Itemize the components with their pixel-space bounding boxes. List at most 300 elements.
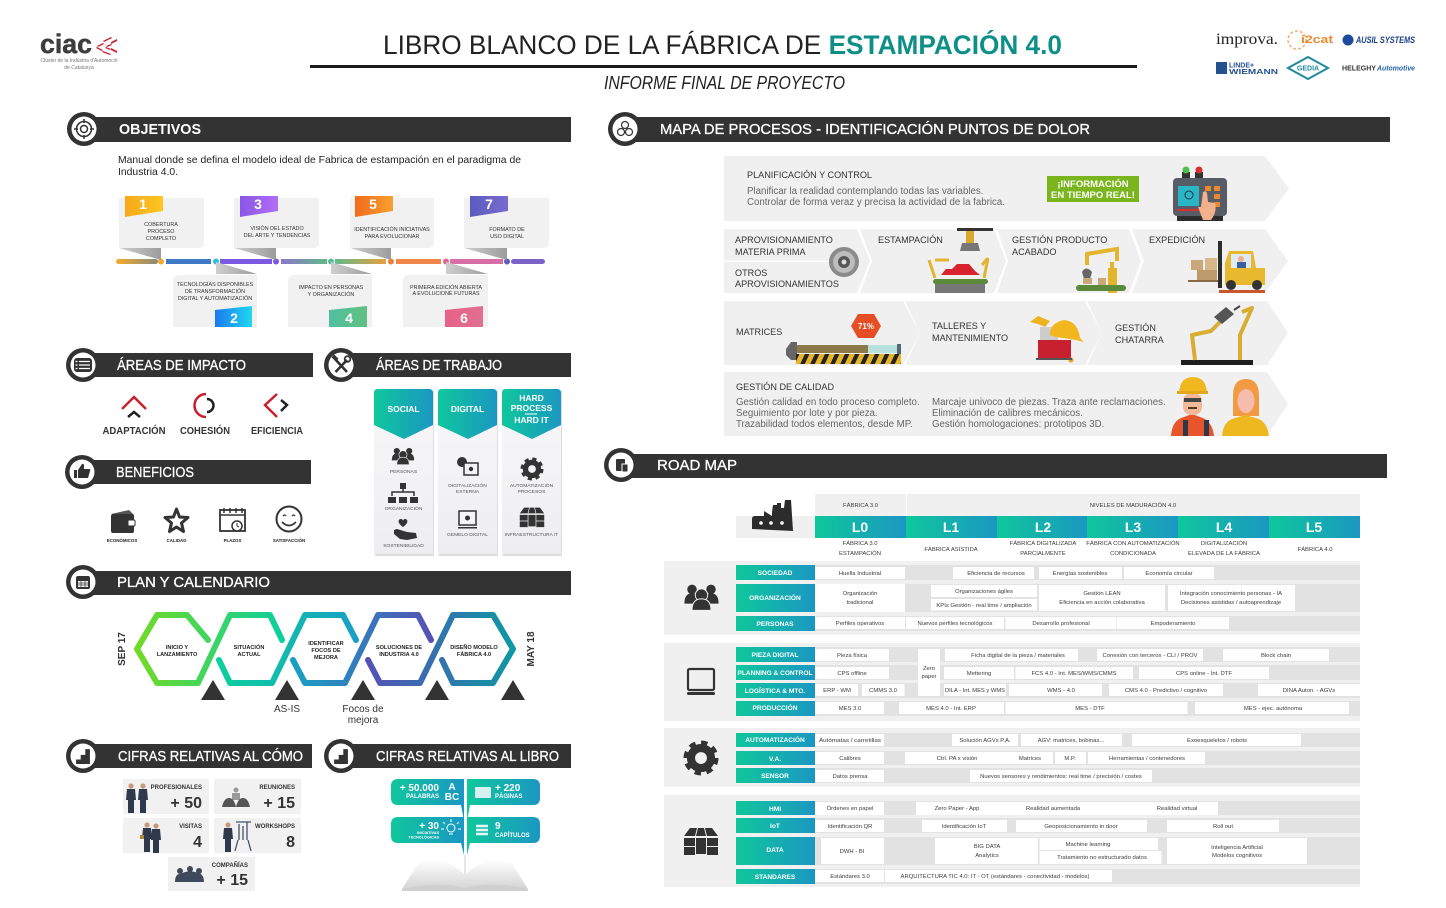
heading: mapa de procesos: MAPA DE PROCESOS - IDENTIFICACIÓN PUNTOS DE DOLOR bbox=[660, 121, 1090, 138]
column: digital: DIGITAL bbox=[451, 404, 484, 414]
column: digital bbox=[438, 389, 498, 556]
row: sociedad: SOCIEDAD bbox=[758, 570, 793, 577]
stat: companias bbox=[168, 857, 255, 891]
bubble: iniciativas bbox=[391, 817, 464, 855]
row: organizacion: KPIs Gestión - real time / ampliación bbox=[936, 603, 1032, 609]
row: sociedad bbox=[736, 565, 1360, 580]
row: automatizacion: Autómatas / carretillas bbox=[819, 738, 881, 744]
row: personas: Desarrollo profesional bbox=[1032, 621, 1090, 627]
segment: matrices bbox=[724, 301, 920, 365]
plan: hexagon chain bbox=[137, 615, 513, 683]
objective card 6 bbox=[403, 262, 488, 327]
stat: profesionales: + 50 bbox=[170, 795, 202, 812]
plan: phase labels: LANZAMIENTO bbox=[157, 652, 198, 658]
level descriptions: CONDICIONADA bbox=[1110, 551, 1156, 557]
segment: talleres y mantenimiento: MANTENIMIENTO bbox=[932, 333, 1008, 343]
row: logistica: DINA Auton. - AGVs bbox=[1283, 688, 1335, 694]
roadmap group: automatizacion bbox=[664, 728, 1360, 787]
levels L0-L5: L0 bbox=[852, 519, 868, 535]
segment: gestion chatarra bbox=[1087, 301, 1288, 365]
stat: workshops: WORKSHOPS bbox=[255, 824, 295, 830]
stat: profesionales bbox=[123, 779, 209, 814]
column: digital: EXTERNA bbox=[456, 489, 480, 495]
objective card 7: 7 bbox=[485, 196, 493, 212]
bubble: palabras: BC bbox=[445, 792, 459, 803]
level descriptions: FÁBRICA 4.0 bbox=[1297, 546, 1333, 553]
column: digital: GEMELO DIGITAL bbox=[447, 532, 488, 538]
row: logistica: LOGÍSTICA & MTO. bbox=[745, 686, 805, 695]
callout: informacion en tiempo real bbox=[1047, 176, 1139, 202]
row: va: Calibres bbox=[839, 756, 861, 762]
column: social bbox=[374, 389, 434, 556]
column: hard process: HARD IT bbox=[514, 415, 550, 425]
stat: visitas: VISITAS bbox=[179, 824, 202, 830]
row: data: Analytics bbox=[975, 853, 999, 859]
cell: zero paper bbox=[918, 649, 940, 696]
level descriptions: FÁBRICA ASISTIDA bbox=[924, 546, 978, 553]
row: organizacion: tradicional bbox=[847, 600, 873, 606]
row: iot bbox=[736, 818, 1360, 833]
objective card 4 bbox=[288, 262, 372, 327]
heading: cifras relativas al libro: CIFRAS RELATIVAS AL LIBRO bbox=[376, 748, 559, 765]
segment: expedicion: EXPEDICIÓN bbox=[1149, 235, 1205, 245]
bubble: iniciativas: + 30 bbox=[419, 821, 439, 832]
row: logistica: ERP - WM bbox=[823, 688, 851, 694]
partner logos: HELEGHY bbox=[1342, 66, 1376, 72]
heading: areas de impacto: ÁREAS DE IMPACTO bbox=[117, 357, 246, 374]
partner logos: LINDE+ bbox=[1229, 62, 1254, 70]
row: pieza digital bbox=[736, 647, 1360, 662]
stat: reuniones: + 15 bbox=[263, 795, 295, 812]
row: personas: Perfiles operativos bbox=[836, 621, 884, 627]
column: hard process bbox=[502, 389, 562, 556]
column: hard process: INFRAESTRUCTURA IT bbox=[505, 532, 558, 538]
row: automatizacion: AGV: matrices, bobinas... bbox=[1038, 738, 1105, 744]
objective card 6: A EVOLUCIONE FUTURAS bbox=[412, 291, 480, 297]
row: organizacion: Organización bbox=[843, 591, 877, 597]
heading: road map: ROAD MAP bbox=[657, 457, 737, 474]
plan: phase labels: FÁBRICA 4.0 bbox=[457, 651, 491, 658]
row: automatizacion bbox=[736, 733, 1360, 747]
level descriptions: FÁBRICA CON AUTOMATIZACIÓN bbox=[1086, 540, 1180, 547]
plan: phase labels: INDUSTRIA 4.0 bbox=[379, 652, 419, 658]
segment: gestion chatarra: CHATARRA bbox=[1115, 335, 1165, 345]
text: calidad izquierda: Trazabilidad todos elementos, desde MP. bbox=[736, 419, 913, 430]
icon: open book bbox=[402, 855, 528, 891]
icon: gemelo digital bbox=[458, 511, 477, 528]
bubble: capitulos: CAPÍTULOS bbox=[495, 831, 530, 839]
partner logos: AUSIL SYSTEMS bbox=[1355, 35, 1415, 45]
row: pieza digital: PIEZA DIGITAL bbox=[752, 652, 798, 659]
row: sensor bbox=[736, 768, 1360, 783]
stat: visitas bbox=[123, 818, 209, 853]
column: hard process: HARD bbox=[519, 393, 544, 403]
row: hmi bbox=[736, 801, 1360, 815]
milestone label: focos de mejora: Focos de bbox=[342, 704, 384, 715]
objective card 4: IMPACTO EN PERSONAS bbox=[299, 285, 364, 291]
level descriptions: PARCIALMENTE bbox=[1020, 551, 1066, 557]
logo: ciac: Clúster de la Indústria d'Automoció bbox=[40, 58, 118, 64]
subtitle: INFORME FINAL DE PROYECTO bbox=[604, 73, 845, 93]
row: produccion: PRODUCCIÓN bbox=[752, 703, 798, 712]
plan: phase labels: IDENTIFICAR bbox=[308, 641, 344, 647]
benefit: economicos bbox=[107, 510, 137, 543]
row: pieza digital: Ficha digital de la pieza / materiales bbox=[971, 653, 1065, 659]
icon: personas bbox=[392, 448, 414, 465]
row: data: Tratamiento no estructurado datos bbox=[1057, 855, 1147, 861]
title underline bbox=[310, 65, 1137, 68]
badge: 71% bbox=[851, 314, 881, 338]
row: logistica: DILA - Int. MES y WMS bbox=[945, 688, 1005, 694]
row: hmi: HMI bbox=[769, 806, 781, 813]
column: social: SOCIAL bbox=[387, 404, 420, 414]
icon: control panel bbox=[1173, 166, 1227, 221]
row: organizacion: Integración conocimiento personas - IA bbox=[1180, 591, 1282, 597]
header: niveles de maduracion: NIVELES DE MADURACIÓN 4.0 bbox=[1090, 502, 1177, 509]
partner logos: GEDIA bbox=[1297, 66, 1319, 72]
logo: ciac bbox=[40, 29, 118, 71]
stat: reuniones: REUNIONES bbox=[259, 785, 295, 791]
level descriptions: FÁBRICA 3.0 bbox=[842, 540, 878, 547]
objective card 3 bbox=[234, 196, 319, 260]
row: produccion: MES 3.0 bbox=[839, 706, 862, 712]
bubble: palabras: + 50.000 bbox=[400, 783, 439, 794]
row: planning and control: FCS 4.0 - Int. MES/WMS/CMMS bbox=[1031, 671, 1117, 677]
process: gestion de calidad bbox=[724, 372, 1288, 436]
plan: phase labels: MEJORA bbox=[314, 655, 338, 661]
row: data bbox=[736, 837, 1360, 865]
row: personas: Nuevos perfiles tecnológicos bbox=[918, 621, 993, 627]
row: iot: Roll out bbox=[1213, 824, 1233, 830]
text: calidad izquierda bbox=[736, 397, 920, 430]
heading: road map bbox=[604, 448, 1387, 482]
row: iot: Geoposicionamiento in door bbox=[1044, 824, 1118, 830]
plan: phase labels bbox=[157, 641, 498, 661]
segment: gestion chatarra: GESTIÓN bbox=[1115, 323, 1156, 333]
row: hmi: Zero Paper - App bbox=[935, 806, 980, 812]
icon: infraestructura bbox=[520, 508, 544, 527]
benefit: plazos bbox=[220, 508, 245, 543]
icon: box bbox=[684, 828, 718, 855]
benefit: plazos: PLAZOS bbox=[224, 538, 241, 543]
row: iot: Identificación QR bbox=[828, 824, 872, 830]
benefit: economicos: ECONÓMICOS bbox=[107, 538, 137, 543]
segment: estampacion: ESTAMPACIÓN bbox=[878, 235, 943, 245]
column: digital: DIGITALIZACIÓN bbox=[448, 482, 487, 489]
plan: phase labels: SITUACIÓN bbox=[234, 643, 264, 651]
text: calidad derecha: Eliminación de calibres mecánicos. bbox=[932, 408, 1083, 419]
plan: start date: SEP 17 bbox=[117, 632, 128, 666]
heading: areas de trabajo bbox=[324, 348, 571, 382]
row: produccion: MES - DTF bbox=[1075, 706, 1105, 712]
stat: companias: + 15 bbox=[216, 872, 248, 889]
objective card 2: DE TRANSFORMACIÓN bbox=[185, 288, 245, 295]
benefit: calidad bbox=[165, 509, 188, 543]
row: organizacion: Organizaciones ágiles bbox=[955, 589, 1013, 595]
heading: cifras relativas al como bbox=[66, 739, 312, 773]
bubble: paginas: + 220 bbox=[495, 783, 521, 794]
row: standares bbox=[736, 869, 1360, 884]
segment: gestion producto acabado: GESTIÓN PRODUCTO bbox=[1012, 235, 1107, 245]
icon: digitalizacion externa bbox=[457, 457, 478, 475]
segment: aprovisionamiento: APROVISIONAMIENTO bbox=[735, 235, 833, 245]
segment: gestion producto acabado: ACABADO bbox=[1012, 247, 1056, 257]
row: data: Machine learning bbox=[1066, 842, 1110, 848]
row: data: DWH - BI bbox=[840, 849, 865, 855]
icon: workers bbox=[1171, 377, 1269, 436]
heading: cifras relativas al libro bbox=[324, 739, 571, 773]
row: sensor: Nuevos sensores y rendimientos: real time / precisión / costes bbox=[980, 774, 1142, 780]
impact: eficiencia bbox=[251, 394, 303, 437]
stat: workshops: 8 bbox=[286, 834, 295, 851]
process: gestion de calidad: GESTIÓN DE CALIDAD bbox=[736, 382, 834, 392]
levels L0-L5: L1 bbox=[943, 519, 959, 535]
column: social: PERSONAS bbox=[390, 469, 418, 475]
heading: plan y calendario: PLAN Y CALENDARIO bbox=[117, 574, 270, 591]
row: data: DATA bbox=[766, 847, 784, 854]
segment: aprovisionamiento: OTROS bbox=[735, 268, 767, 278]
objective card 2 bbox=[173, 262, 257, 327]
objective card 1 bbox=[119, 196, 204, 260]
row: pieza digital: Pieza física bbox=[837, 653, 868, 659]
partner logos: improva. bbox=[1216, 31, 1278, 48]
row: pieza digital: Conexión con terceros - CLI / PROV bbox=[1103, 653, 1198, 659]
stat: companias: COMPAÑÍAS bbox=[212, 861, 248, 869]
heading: objetivos: OBJETIVOS bbox=[119, 121, 201, 138]
badge: 71%: 71% bbox=[858, 322, 874, 331]
icon: sostenibilidad bbox=[394, 519, 417, 540]
stat: profesionales: PROFESIONALES bbox=[151, 785, 202, 791]
row: sociedad: Energías sostenibles bbox=[1053, 571, 1107, 577]
row: data: BIG DATA bbox=[974, 844, 1000, 850]
heading: plan y calendario bbox=[66, 565, 571, 599]
objective card 4: 4 bbox=[345, 310, 353, 326]
row: sensor: SENSOR bbox=[761, 773, 789, 780]
levels L0-L5: L5 bbox=[1306, 519, 1322, 535]
row: standares: STANDARES bbox=[755, 874, 796, 881]
objetivos text: Manual donde se defina el modelo ideal de Fabrica de estampación en el paradigma de bbox=[118, 154, 521, 166]
impact: eficiencia: EFICIENCIA bbox=[251, 426, 303, 437]
row: logistica: CMS 4.0 - Predictivo / cognitivo bbox=[1125, 688, 1208, 694]
impact: cohesion bbox=[180, 394, 230, 437]
row: personas: PERSONAS bbox=[756, 621, 794, 628]
milestone label: focos de mejora: mejora bbox=[348, 715, 379, 726]
row: pieza digital: Block chain bbox=[1261, 653, 1291, 659]
row: planning and control: CPS online - Int. DTF bbox=[1176, 671, 1232, 677]
objective card 3: 3 bbox=[254, 196, 262, 212]
process: planificacion y control: PLANIFICACIÓN Y CONTROL bbox=[747, 170, 872, 180]
segment: talleres y mantenimiento bbox=[905, 301, 1102, 365]
cell: zero paper: paper bbox=[921, 674, 937, 680]
process: planificacion y control: Planificar la realidad contemplando todas las variables. bbox=[747, 186, 983, 197]
bubble: capitulos: 9 bbox=[495, 821, 501, 832]
row: va: Herramientas / contenedores bbox=[1109, 756, 1185, 762]
callout: informacion en tiempo real: EN TIEMPO REAL! bbox=[1051, 190, 1135, 201]
objective card 6: 6 bbox=[460, 310, 468, 326]
process: planificacion y control: Controlar de forma veraz y precisa la actividad de la fabrica. bbox=[747, 197, 1005, 208]
column: social: ORGANIZACIÓN bbox=[385, 505, 423, 512]
level descriptions bbox=[839, 540, 1333, 557]
segment: aprovisionamiento: APROVISIONAMIENTOS bbox=[735, 279, 839, 289]
roadmap group: it bbox=[664, 795, 1360, 887]
column: hard process: PROCESOS bbox=[518, 489, 546, 495]
plan: phase labels: ACTUAL bbox=[238, 652, 261, 658]
text: calidad derecha: Gestión homologaciones: prototipos 3D. bbox=[932, 419, 1104, 430]
levels L0-L5: L4 bbox=[1216, 519, 1232, 535]
benefit: satisfaccion: SATISFACCIÓN bbox=[273, 538, 305, 543]
row: planning and control: PLANNING & CONTROL bbox=[738, 670, 812, 677]
bubble: paginas bbox=[467, 779, 540, 821]
row: automatizacion: AUTOMATIZACIÓN bbox=[745, 735, 805, 744]
plan: phase labels: FOCOS DE bbox=[311, 648, 341, 654]
segment: talleres y mantenimiento: TALLERES Y bbox=[932, 321, 986, 331]
levels L0-L5: L2 bbox=[1035, 519, 1051, 535]
objective card 3: DEL ARTE Y TENDENCIAS bbox=[244, 233, 311, 239]
row: personas bbox=[736, 616, 1360, 631]
objective card 6: PRIMERA EDICIÓN ABIERTA bbox=[410, 284, 482, 291]
levels L0-L5: L3 bbox=[1125, 519, 1141, 535]
row: sociedad: Economía circular bbox=[1145, 571, 1193, 577]
text: calidad derecha: Marcaje univoco de piezas. Traza ante reclamaciones. bbox=[932, 397, 1166, 408]
heading: areas de trabajo: ÁREAS DE TRABAJO bbox=[376, 357, 502, 374]
row: sensor: Datos prensa bbox=[832, 774, 868, 780]
icon: organizacion bbox=[388, 483, 418, 503]
bubble: paginas: PÁGINAS bbox=[495, 793, 522, 800]
bubble: palabras: PALABRAS bbox=[406, 794, 439, 800]
column: hard process: PROCESS bbox=[511, 403, 553, 413]
logo: ciac: ciac bbox=[40, 29, 92, 59]
row: planning and control: Mettering bbox=[967, 671, 991, 677]
plan: milestones bbox=[201, 680, 525, 700]
levels L0-L5 bbox=[815, 516, 1360, 538]
title: LIBRO BLANCO DE LA FÁBRICA DE ESTAMPACIÓN 4.0 bbox=[383, 29, 1062, 60]
plan: phase labels: DISEÑO MODELO bbox=[450, 644, 498, 651]
logo: ciac: de Catalunya bbox=[64, 65, 94, 71]
heading: beneficios bbox=[65, 455, 311, 489]
callout: informacion en tiempo real: ¡INFORMACIÓN bbox=[1057, 178, 1129, 190]
objective card 1: PROCESO bbox=[148, 229, 174, 235]
text: calidad izquierda: Seguimiento por lote y por pieza. bbox=[736, 408, 878, 419]
objective card 5: PARA EVOLUCIONAR bbox=[365, 234, 419, 240]
objective card 2: 2 bbox=[230, 310, 238, 326]
impact: cohesion: COHESIÓN bbox=[180, 424, 230, 437]
row: organizacion: ORGANIZACIÓN bbox=[749, 593, 801, 602]
row: hmi: Órdenes en papel bbox=[827, 805, 873, 812]
segment: gestion producto acabado bbox=[997, 229, 1141, 293]
row: standares: Estándares 3.0 bbox=[830, 874, 871, 880]
objetivos text bbox=[118, 154, 521, 178]
row: logistica: WMS - 4.0 bbox=[1047, 688, 1076, 694]
level descriptions: DIGITALIZACIÓN bbox=[1201, 540, 1247, 547]
partner logos: i2cat bbox=[1301, 34, 1333, 46]
milestone label: focos de mejora bbox=[342, 704, 384, 726]
heading: areas de impacto bbox=[66, 348, 313, 382]
header: fabrica 3.0: FÁBRICA 3.0 bbox=[843, 502, 879, 509]
row: organizacion: Decisiones asistidas / autoaprendizaje bbox=[1181, 600, 1282, 606]
row: automatizacion: Exoesqueletos / robots bbox=[1187, 738, 1247, 744]
benefit: satisfaccion bbox=[273, 506, 305, 543]
objective card 5: 5 bbox=[369, 196, 377, 212]
row: logistica: CMMS 3.0 bbox=[869, 688, 898, 694]
plan: end date: MAY 18 bbox=[526, 631, 537, 667]
objective card 4: Y ORGANIZACIÓN bbox=[308, 291, 354, 298]
row: sociedad: Eficiencia de recursos bbox=[967, 571, 1025, 577]
row: sociedad: Huella Industrial bbox=[839, 571, 881, 577]
column: hard process: AUTOMATIZACIÓN bbox=[510, 482, 554, 489]
header: niveles de maduracion bbox=[907, 494, 1360, 516]
row: personas: Empoderamiento bbox=[1151, 621, 1196, 627]
timeline bar bbox=[116, 258, 545, 264]
heading: objetivos bbox=[67, 112, 571, 146]
objective card 2: DIGITAL Y AUTOMATIZACIÓN bbox=[178, 295, 252, 302]
segment: aprovisionamiento bbox=[724, 229, 870, 293]
segment: estampacion bbox=[860, 228, 1006, 293]
objective card 5: IDENTIFICACIÓN INICIATIVAS bbox=[354, 226, 430, 233]
row: standares: ARQUITECTURA TIC 4.0: IT - OT (estándares - conectividad - modelos) bbox=[901, 874, 1089, 880]
impact: adaptacion: ADAPTACIÓN bbox=[102, 424, 166, 437]
icon: gear bbox=[686, 743, 716, 773]
objetivos text: Industria 4.0. bbox=[118, 166, 178, 178]
row: planning and control bbox=[736, 665, 1360, 680]
objective card 7: USO DIGITAL bbox=[490, 234, 524, 240]
row: organizacion bbox=[736, 584, 1360, 612]
process row: flujo de producción bbox=[724, 228, 1288, 293]
bubble: iniciativas: INICIATIVAS bbox=[417, 831, 439, 835]
level descriptions: ELEVADA DE LA FÁBRICA bbox=[1188, 550, 1260, 557]
benefit: calidad: CALIDAD bbox=[167, 538, 186, 543]
icon: factory bbox=[736, 500, 815, 538]
row: produccion: MES - ejec. autónoma bbox=[1244, 706, 1303, 712]
objective card 7 bbox=[464, 196, 549, 260]
level descriptions: ESTAMPACIÓN bbox=[839, 550, 881, 557]
objective card 1: COBERTURA bbox=[144, 222, 178, 228]
objective card 1: COMPLETO bbox=[146, 236, 176, 242]
roadmap group: personas bbox=[664, 561, 1360, 635]
bubble: capitulos bbox=[467, 817, 540, 855]
partner logos bbox=[1216, 31, 1415, 79]
book figures bbox=[391, 779, 540, 891]
level descriptions: FÁBRICA DIGITALIZADA bbox=[1010, 540, 1076, 547]
stat: workshops bbox=[214, 818, 301, 853]
plan: phase labels: SOLUCIONES DE bbox=[376, 645, 422, 651]
row: produccion bbox=[736, 701, 1360, 716]
column: social: SOSTENIBILIDAD bbox=[383, 543, 424, 549]
text: calidad derecha bbox=[932, 397, 1166, 430]
stat: reuniones bbox=[214, 779, 301, 814]
row: organizacion: Eficiencia en acción colaborativa bbox=[1059, 600, 1145, 606]
row: va: V.A. bbox=[769, 756, 781, 763]
objective card 7: FORMATO DE bbox=[489, 227, 525, 233]
objective card 2: TECNOLOGÍAS DISPONIBLES bbox=[177, 281, 254, 288]
row: data: Modelos cognitivos bbox=[1212, 853, 1262, 859]
row: va bbox=[736, 751, 1360, 765]
process: planificacion y control bbox=[724, 156, 1289, 221]
row: iot: Identificación IoT bbox=[942, 824, 987, 830]
objective card 1: 1 bbox=[139, 196, 147, 212]
segment: expedicion bbox=[1132, 229, 1288, 293]
row: data: Inteligencia Artificial bbox=[1211, 845, 1263, 851]
plan: phase labels: INICIO Y bbox=[166, 645, 188, 651]
stat: visitas: 4 bbox=[193, 834, 202, 851]
row: planning and control: CPS offline bbox=[837, 671, 867, 677]
bubble: palabras bbox=[391, 779, 464, 821]
segment: aprovisionamiento: MATERIA PRIMA bbox=[735, 247, 807, 257]
segment: matrices: MATRICES bbox=[736, 327, 782, 337]
heading: beneficios: BENEFICIOS bbox=[116, 464, 194, 481]
row: produccion: MES 4.0 - Int. ERP bbox=[926, 706, 976, 712]
objective card 5 bbox=[350, 196, 434, 260]
row: iot: IoT bbox=[770, 823, 780, 830]
